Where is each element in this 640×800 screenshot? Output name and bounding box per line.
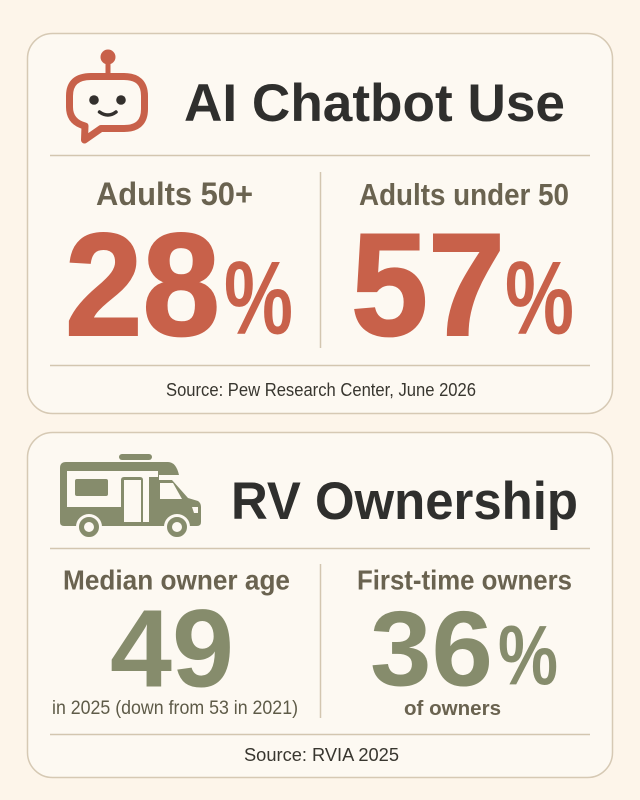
- stat: adults 50 plus: [65, 176, 293, 366]
- stat: adults under 50: [351, 177, 574, 366]
- stat: first-time owners: %: [498, 608, 558, 702]
- stat: first-time owners: [357, 564, 572, 720]
- stat: adults 50 plus: Adults 50+: [96, 176, 253, 212]
- icon: RV: [60, 454, 201, 538]
- stat: first-time owners: First-time owners: [357, 564, 572, 596]
- source: RVIA: Source: RVIA 2025: [244, 745, 399, 765]
- stat: median owner age: 49: [110, 588, 234, 710]
- stat: median owner age: in 2025 (down from 53 in 2021): [52, 698, 298, 719]
- title: AI Chatbot Use: AI Chatbot Use: [184, 74, 565, 133]
- stat: adults under 50: 57: [351, 203, 505, 366]
- stat: adults under 50: Adults under 50: [359, 177, 569, 212]
- panel: RV ownership: [28, 432, 612, 778]
- icon: chatbot: [70, 50, 144, 140]
- stat: adults under 50: %: [505, 240, 574, 356]
- stat: first-time owners: 36: [370, 588, 493, 708]
- stat: median owner age: Median owner age: [63, 564, 290, 596]
- panel: AI chatbot use: [28, 34, 612, 414]
- stat: adults 50 plus: 28: [65, 203, 220, 366]
- stat: first-time owners: of owners: [404, 698, 501, 720]
- stat: median owner age: [52, 564, 298, 719]
- source: Pew: Source: Pew Research Center, June 2026: [166, 380, 476, 400]
- stat: adults 50 plus: %: [224, 240, 293, 356]
- title: RV Ownership: RV Ownership: [231, 472, 578, 531]
